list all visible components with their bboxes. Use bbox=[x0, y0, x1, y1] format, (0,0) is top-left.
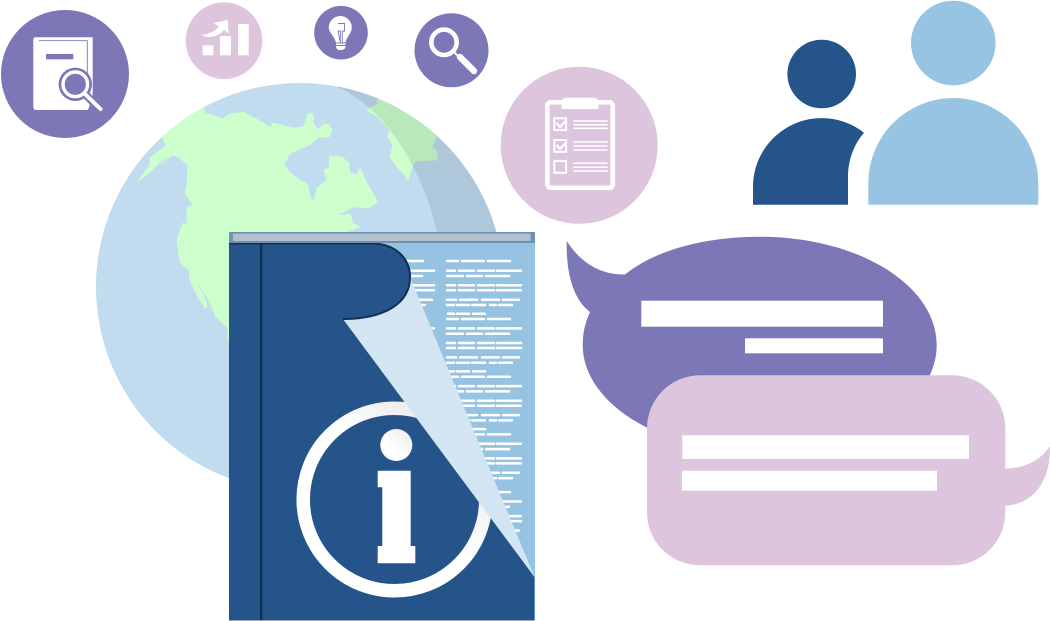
person: light blue bbox=[868, 1, 1038, 205]
land: North America bbox=[137, 108, 378, 340]
blue cover bbox=[229, 243, 534, 620]
people icons bbox=[753, 1, 1038, 205]
curl edge bbox=[229, 244, 410, 319]
speech bubble: pink bbox=[647, 375, 1050, 565]
info icon bbox=[303, 408, 486, 591]
globe shadow crescent bbox=[337, 86, 496, 232]
page text lines bbox=[360, 261, 521, 550]
info booklet bbox=[229, 232, 535, 620]
speech bubble: purple bbox=[567, 237, 937, 453]
spine bbox=[260, 243, 262, 620]
person: dark blue bbox=[753, 40, 864, 205]
top binding strip bbox=[229, 232, 535, 243]
turned page flap bbox=[343, 277, 534, 577]
page background bbox=[229, 243, 535, 620]
land: Greenland bbox=[367, 100, 445, 180]
globe bbox=[96, 83, 496, 478]
icon: growth chart bbox=[186, 2, 262, 79]
icon: magnifying glass bbox=[414, 13, 488, 87]
icon: light bulb bbox=[314, 6, 368, 60]
icon: checklist clipboard bbox=[501, 67, 658, 224]
icon: document search bbox=[1, 10, 129, 138]
